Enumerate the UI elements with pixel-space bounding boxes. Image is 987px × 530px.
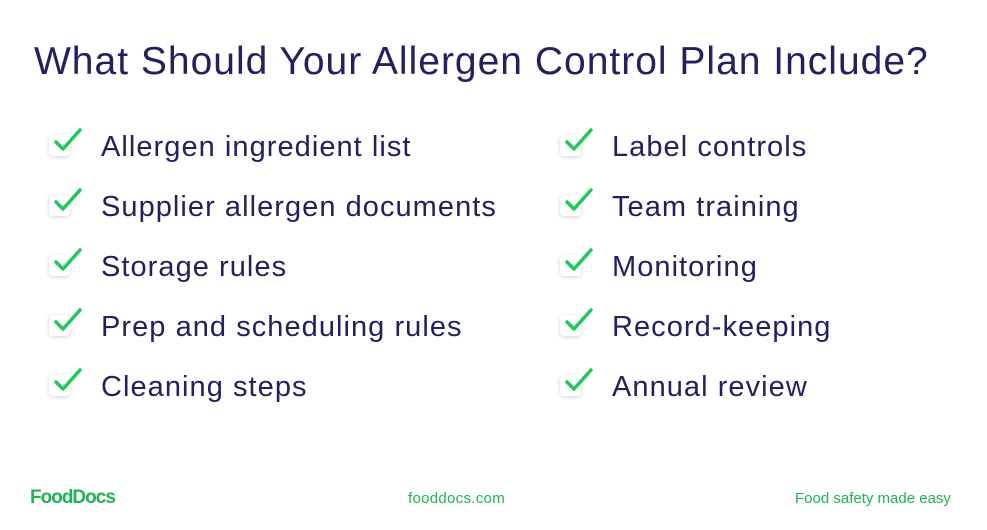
footer tagline: Food safety made easy: [795, 490, 951, 507]
item: Allergen ingredient list: Allergen ingredient list: [101, 131, 412, 163]
footer url: fooddocs.com: [408, 490, 505, 507]
item: Label controls: Label controls: [612, 131, 807, 163]
item: Storage rules: Storage rules: [101, 251, 287, 283]
item: Supplier allergen documents: Supplier allergen documents: [101, 191, 497, 223]
title: What Should Your Allergen Control Plan Include?: [34, 40, 929, 83]
item: Annual review: Annual review: [612, 371, 808, 403]
item: Monitoring: [558, 248, 758, 283]
item: Prep and scheduling rules: Prep and scheduling rules: [101, 311, 463, 343]
item: Monitoring: Monitoring: [612, 251, 758, 283]
logo: FoodDocs: FoodDocs: [30, 487, 115, 508]
item: Team training: Team training: [612, 191, 800, 223]
item: Record-keeping: Record-keeping: [612, 311, 831, 343]
item: Cleaning steps: Cleaning steps: [101, 371, 308, 403]
